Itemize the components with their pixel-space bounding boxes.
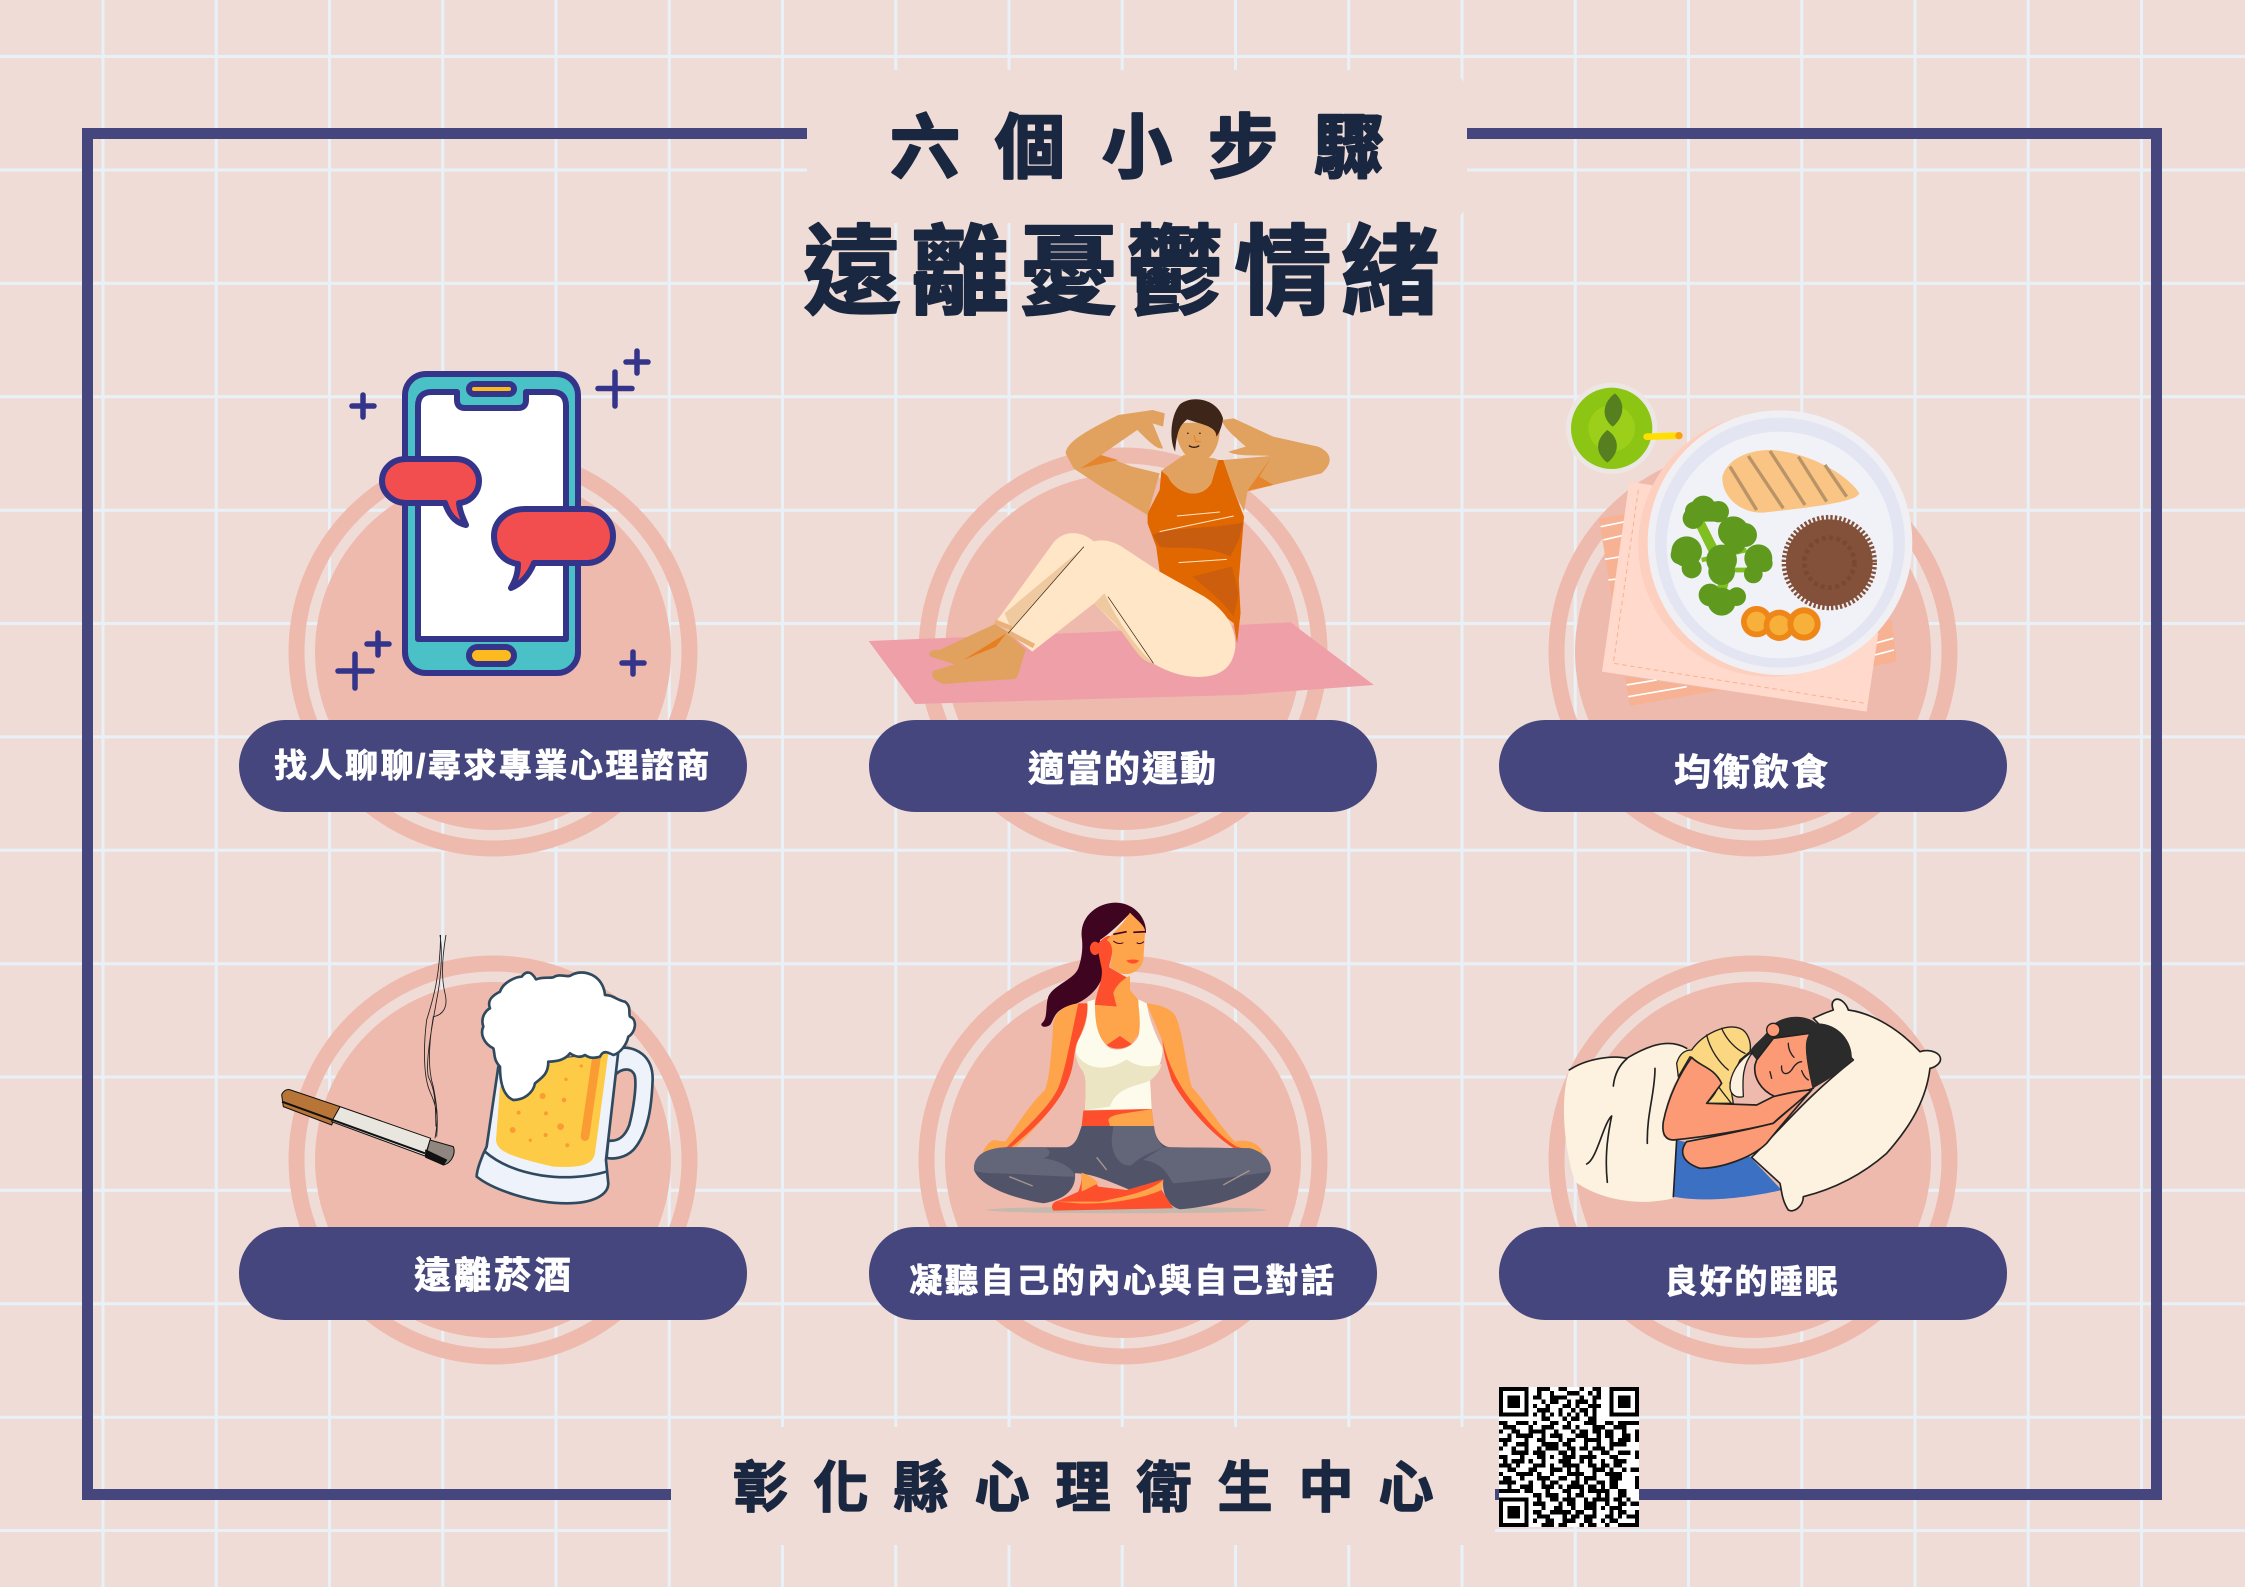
pill label: listen to yourself: 凝聽自己的內心與自己對話 — [909, 1262, 1337, 1299]
beer liquid — [496, 1053, 608, 1167]
yellow shirt — [1677, 1027, 1750, 1103]
feet — [929, 624, 1010, 665]
smoke wisp — [424, 935, 446, 1138]
yoga mat — [869, 622, 1374, 704]
illustration: meditating woman — [974, 903, 1271, 1213]
carrot slices — [1741, 606, 1821, 641]
footer organisation name: 彰化縣心理衛生中心 — [733, 1457, 1434, 1519]
front leg — [1009, 540, 1235, 677]
arms and shoulders — [1066, 410, 1165, 515]
pill label: balanced diet: 均衡飲食 — [1674, 752, 1830, 793]
left arm — [983, 1003, 1087, 1153]
circle backdrop: talk — [296, 456, 690, 848]
grilled chicken — [1722, 450, 1859, 513]
icon: smartphone with chat bubbles — [338, 351, 648, 688]
crossed feet — [1052, 1173, 1173, 1211]
back leg — [995, 533, 1094, 632]
face — [1175, 422, 1220, 463]
title panel — [807, 70, 1467, 223]
plate — [1648, 410, 1912, 675]
napkin — [1602, 482, 1878, 712]
upper arm — [1663, 1057, 1812, 1140]
footer panel — [671, 1427, 1495, 1545]
striped placemat — [1599, 513, 1897, 706]
blue shorts — [1673, 1140, 1782, 1199]
pill label: listen to yourself — [869, 1227, 1377, 1320]
illustration: cigarette and beer mug — [282, 935, 653, 1203]
midriff — [1082, 1109, 1154, 1127]
grey leggings — [974, 1126, 1271, 1209]
neck shadow — [1095, 936, 1127, 1007]
green smoothie — [1566, 383, 1683, 474]
pill label: balanced diet — [1499, 720, 2007, 812]
circle backdrop: meditation — [926, 964, 1320, 1356]
pillow — [1752, 999, 1940, 1211]
circle backdrop: exercise — [926, 456, 1320, 848]
floor shadow — [987, 1207, 1267, 1213]
illustration: person sleeping on pillow — [1564, 999, 1940, 1211]
white tank top — [1076, 999, 1163, 1110]
circle backdrop: diet — [1556, 456, 1950, 848]
brown rice — [1786, 519, 1873, 606]
pill label: good sleep: 良好的睡眠 — [1664, 1263, 1840, 1300]
frame border — [88, 134, 2156, 1494]
orange tank top — [1148, 460, 1244, 643]
pill label: talk to someone: 找人聊聊/尋求專業心理諮商 — [274, 747, 712, 784]
pill label: exercise — [869, 720, 1377, 812]
collar — [1730, 1052, 1753, 1097]
title line 2: 遠離憂鬱情緒 — [803, 217, 1439, 327]
hair — [1171, 399, 1223, 452]
chest and neck — [1161, 455, 1218, 494]
face — [1755, 1033, 1813, 1097]
pill label: good sleep — [1499, 1227, 2007, 1320]
circle backdrop: sleep — [1556, 964, 1950, 1356]
illustration: balanced meal plate — [1566, 383, 1912, 712]
beer foam — [482, 972, 635, 1100]
pill label: avoid tobacco and alcohol — [239, 1227, 747, 1320]
pill label: exercise: 適當的運動 — [1028, 748, 1218, 789]
pill label: talk to someone — [239, 720, 747, 812]
blanket — [1564, 1043, 1687, 1202]
illustration: woman doing sit-ups on mat — [869, 399, 1374, 704]
title line 1: 六個小步驟 — [890, 109, 1384, 187]
cigarette — [282, 1090, 454, 1165]
face — [1107, 913, 1145, 974]
circle backdrop: smoke and alcohol — [296, 964, 690, 1356]
right arm — [1147, 1003, 1263, 1153]
broccoli — [1671, 496, 1773, 616]
lower arm — [1683, 1092, 1810, 1168]
QR code — [1499, 1387, 1639, 1527]
hair — [1750, 1017, 1852, 1088]
neck and chest — [1095, 976, 1142, 1045]
pill label: avoid tobacco and alcohol: 遠離菸酒 — [414, 1255, 574, 1296]
hair — [1041, 903, 1146, 1027]
beer mug — [477, 1048, 653, 1203]
